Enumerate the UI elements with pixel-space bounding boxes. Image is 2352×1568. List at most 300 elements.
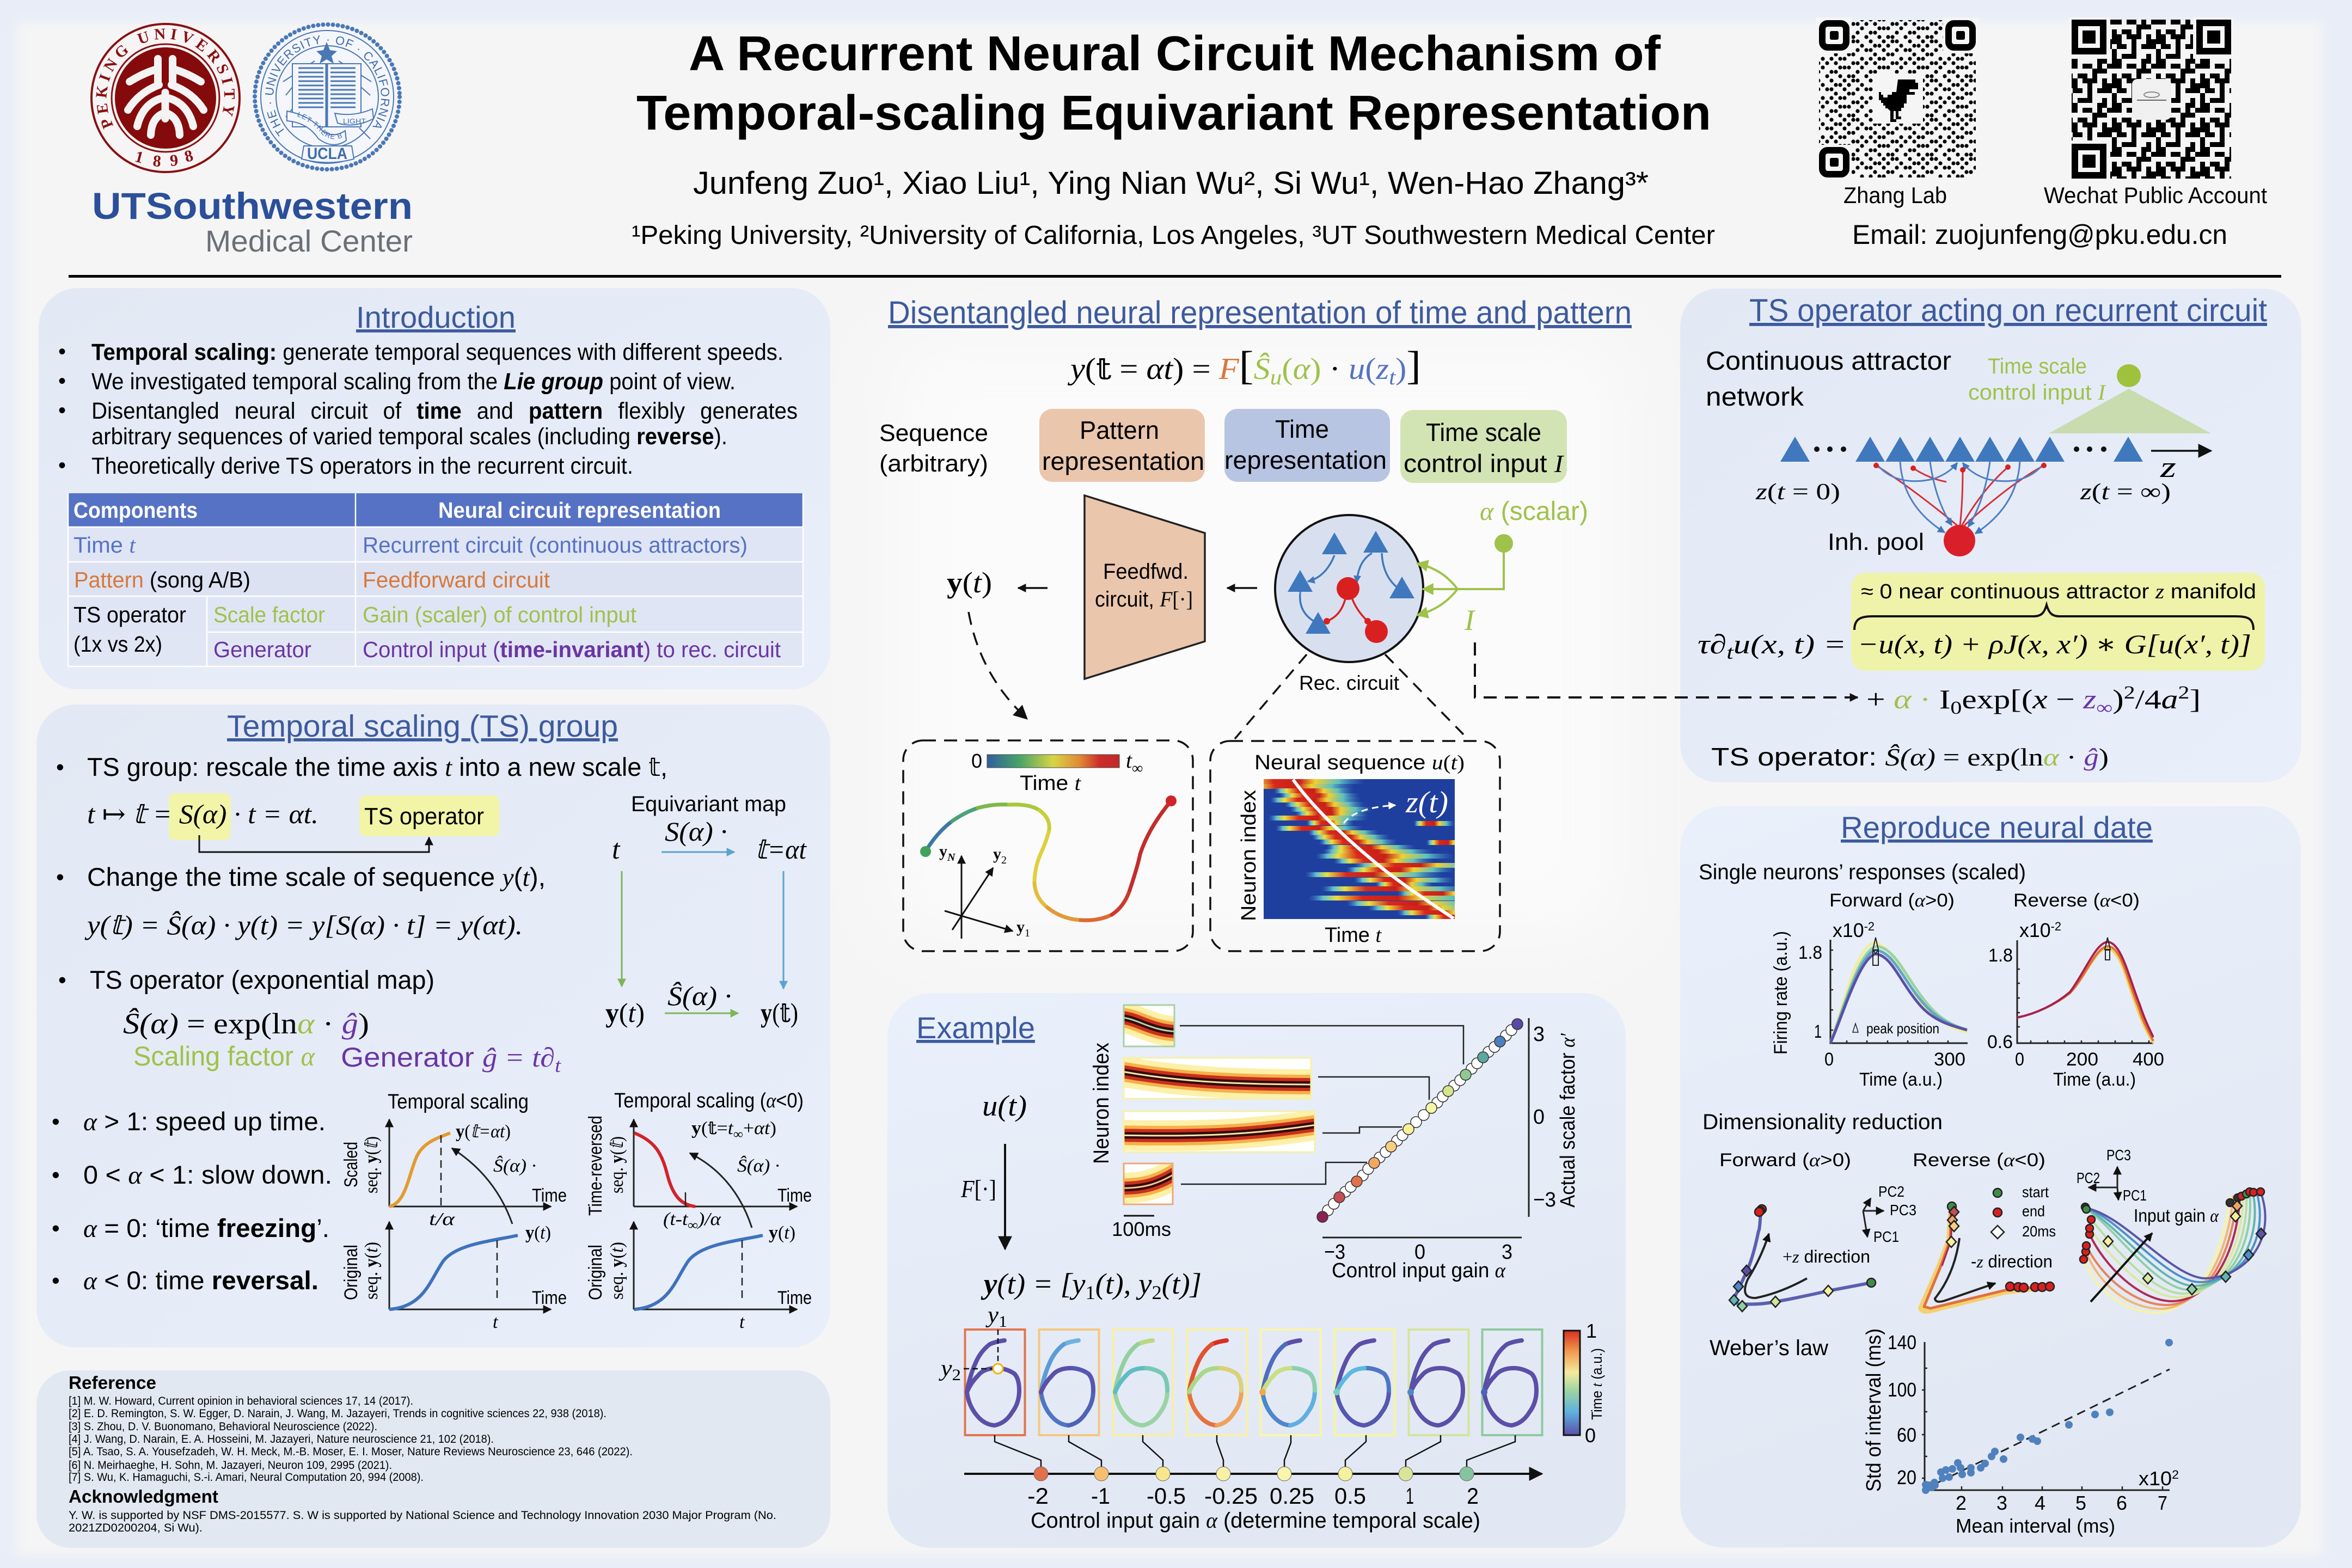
table: components: Control input (time-invariant) to rec. circuit xyxy=(363,637,781,662)
gain axis with connectors: -1 xyxy=(1091,1483,1110,1509)
diagram: equivariant map: Equivariant map xyxy=(631,792,786,816)
chart: temporal scaling reverse: ∞ xyxy=(733,1128,743,1142)
label: generator: Generator ĝ = t∂ xyxy=(341,1042,549,1073)
chart: temporal scaling forward: Temporal scaling xyxy=(388,1091,529,1113)
chart: reverse trajectory xyxy=(1913,1150,2056,1311)
equation: dynamics: + α · I xyxy=(1866,684,1949,714)
colorbar: time: Time t (a.u.) xyxy=(1589,1348,1605,1420)
chart: Weber's law scatter: 2 xyxy=(2172,1468,2179,1481)
recurrent circuit xyxy=(1275,515,1423,662)
heading: Introduction: Introduction xyxy=(356,300,516,334)
F label: F[·] xyxy=(960,1175,996,1203)
chart: input gain trajectories: PC1 xyxy=(2123,1187,2147,1204)
subheading: single neurons: Single neurons’ responses (scaled) xyxy=(1699,860,2026,884)
bullet list: Disentangled neural circuit of time and pattern flexibly generates xyxy=(91,398,798,424)
network diagram: z(t = 0) xyxy=(1755,480,1840,505)
gain axis with connectors: 0.5 xyxy=(1334,1483,1366,1509)
bullet list: arbitrary sequences of varied temporal scales (including reverse). xyxy=(91,424,727,450)
table: components: Time t xyxy=(74,532,137,558)
control input arrows xyxy=(1417,534,1513,615)
diagram: equivariant map: t xyxy=(612,834,621,865)
formula: disentangled: ) xyxy=(1395,352,1406,386)
chart: Weber's law scatter: 5 xyxy=(2075,1492,2086,1514)
gain axis with connectors: -2 xyxy=(1027,1483,1049,1509)
table: components: Gain (scaler) of control input xyxy=(363,602,637,627)
bullets: TS group xyxy=(52,752,667,1295)
chart: temporal scaling reverse: Time xyxy=(777,1288,812,1308)
box: time scale control input xyxy=(1400,410,1567,483)
bullet list: Temporal scaling: generate temporal sequences with different speeds. xyxy=(91,339,783,365)
control input node and projection xyxy=(2049,364,2211,433)
chart: Weber's law scatter: Mean interval (ms) xyxy=(1956,1515,2115,1537)
chart: actual scale factor vs control gain: Control input gain α xyxy=(1332,1259,1506,1282)
chart: temporal scaling forward: Ŝ(α) · xyxy=(493,1155,536,1176)
panel: example xyxy=(887,993,1626,1548)
icon: dinosaur xyxy=(1879,79,1918,122)
chart: temporal scaling forward: Time xyxy=(532,1288,567,1308)
equation: dynamics: t xyxy=(1726,641,1734,663)
bullet list: Theoretically derive TS operators in the recurrent circuit. xyxy=(91,453,633,479)
y1 y2 labels xyxy=(939,1303,1007,1384)
chart: temporal scaling forward: seq. y(t) xyxy=(362,1242,382,1300)
heading: Temporal scaling (TS) group: Temporal scaling (TS) group xyxy=(227,709,618,744)
affiliations: ¹Peking University, ²University of California, Los Angeles, ³UT Southwestern Medical Center xyxy=(632,221,1715,250)
bullet list: • xyxy=(58,369,66,393)
chart: temporal scaling reverse xyxy=(585,1089,812,1332)
formula: y(t): (t)] xyxy=(1162,1267,1202,1300)
logo: Peking University seal: 8 xyxy=(152,152,162,170)
chart: Weber's law scatter: Std of interval (ms) xyxy=(1863,1328,1885,1492)
feedforward trapezoid xyxy=(1085,495,1205,679)
panel: neural sequence heatmap: z(t) xyxy=(1405,786,1448,819)
panel: neural sequence heatmap xyxy=(1210,741,1500,951)
equation: dynamics: u(x, t) = xyxy=(1734,629,1846,659)
chart: temporal scaling forward: y(t) xyxy=(525,1223,551,1243)
formula: sequence scaling: y(𝕥) = Ŝ(α) · y(t) = y[S(α) · t] = y(αt). xyxy=(84,910,523,940)
equation: dynamics: a xyxy=(2161,684,2178,714)
title: A Recurrent Neural Circuit Mechanism of xyxy=(689,27,1661,81)
chart: Weber's law scatter: x10 xyxy=(2139,1467,2170,1490)
chart: temporal scaling reverse: )/α xyxy=(697,1209,721,1229)
y1 y2 labels: y xyxy=(941,1356,951,1381)
gain axis with connectors: -0.25 xyxy=(1204,1483,1258,1509)
label: sequence: (arbitrary) xyxy=(879,450,988,477)
legend: start end 20ms xyxy=(1991,1189,2004,1239)
chart: forward firing rate: Forward ( α>0) xyxy=(1829,890,1955,911)
heading: Example: Example xyxy=(916,1010,1035,1045)
heading: Acknowledgment: Acknowledgment xyxy=(69,1486,218,1506)
chart: actual scale factor vs control gain: 3 xyxy=(1502,1241,1512,1264)
bullets: alpha regimes: α = 0: ‘time freezing’. xyxy=(83,1214,329,1243)
reference list: [4] J. Wang, D. Narain, E. A. Hosseini, M. Jazayeri, Nature neuroscience 21, 102 (2018). xyxy=(69,1433,494,1445)
chart: temporal scaling reverse: Original xyxy=(585,1245,606,1300)
chart: temporal scaling forward: t xyxy=(493,1312,499,1332)
arrow: F mapping xyxy=(1004,1144,1006,1249)
table: components: Components xyxy=(74,498,198,523)
scale bar: 100ms: 100ms xyxy=(1112,1218,1171,1240)
highlight: recurrent term: ≈ 0 near continuous attractor z manifold xyxy=(1861,580,2256,603)
email: Email: zuojunfeng@pku.edu.cn xyxy=(1852,219,2227,250)
box: time scale control input: Time scale xyxy=(1426,418,1541,446)
box: pattern representation xyxy=(1039,409,1205,482)
chart: temporal scaling reverse: y(𝕥=t xyxy=(691,1118,733,1138)
reference list: [1] M. W. Howard, Current opinion in behavioral sciences 17, 14 (2017). xyxy=(69,1395,413,1407)
table: components: TS operator xyxy=(74,602,186,627)
equation: dynamics: 2 xyxy=(2178,683,2189,703)
table: components: Pattern (song A/B) xyxy=(74,567,250,592)
diagram: equivariant map: y(t) xyxy=(605,997,645,1028)
chart: Weber's law scatter: 6 xyxy=(2116,1492,2127,1514)
label: scaling factor: Scaling factor α xyxy=(133,1041,316,1071)
label: time scale control input: control input I xyxy=(1968,380,2106,405)
chart: reverse firing rate: Time (a.u.) xyxy=(2053,1069,2136,1090)
chart: Weber's law scatter: 60 xyxy=(1897,1424,1916,1446)
digit six panels xyxy=(964,1330,1542,1435)
gain axis with connectors: -0.5 xyxy=(1147,1483,1186,1509)
gain axis with connectors: Control input gain α (determine temporal scale) xyxy=(1031,1508,1480,1533)
formula: y(t): y(t) = [y xyxy=(984,1267,1084,1300)
label: time scale control input xyxy=(1968,354,2106,405)
bullets: alpha regimes: 0 < α < 1: slow down. xyxy=(83,1160,332,1190)
equation: dynamics: τ∂ xyxy=(1698,629,1721,659)
chart: reverse firing rate: x10 xyxy=(2019,919,2051,941)
panel: trajectory: ∞ xyxy=(1132,760,1143,777)
formula: disentangled: u xyxy=(1270,365,1282,389)
bullets: alpha regimes xyxy=(52,1107,332,1295)
chart: temporal scaling reverse: (t-t xyxy=(663,1209,686,1229)
table: components: Neural circuit representation xyxy=(438,498,721,523)
output y(t): y(t) xyxy=(947,566,992,599)
arrow: circuit to feedforward xyxy=(1227,587,1257,589)
logo: UT Southwestern: UTSouthwestern xyxy=(92,185,413,227)
network diagram: z(t = ∞) xyxy=(2080,480,2171,505)
chart: forward firing rate: 0 xyxy=(1824,1049,1834,1070)
panel: TS operator on recurrent circuit xyxy=(1680,289,2301,782)
logo: UCLA seal: UCLA xyxy=(307,145,347,163)
authors: Junfeng Zuo¹, Xiao Liu¹, Ying Nian Wu², Si Wu¹, Wen-Hao Zhang³* xyxy=(693,166,1649,201)
panel: introduction xyxy=(39,288,830,689)
chart: reverse trajectory: Reverse ( α<0) xyxy=(1913,1150,2045,1171)
label: continuous attractor network: network xyxy=(1706,383,1804,412)
bullets: alpha regimes: α > 1: speed up time. xyxy=(83,1107,326,1136)
chart: temporal scaling reverse: seq. y(t) xyxy=(607,1242,627,1300)
formula: y(t): 1 xyxy=(1085,1282,1095,1303)
chart: input gain trajectories xyxy=(2077,1147,2266,1313)
box: time representation xyxy=(1224,409,1390,482)
chart: temporal scaling forward: Scaled xyxy=(341,1142,362,1187)
chart: reverse firing rate: 0 xyxy=(2015,1049,2024,1070)
equation: dynamics: ) xyxy=(2112,684,2124,714)
chart: Weber's law scatter: 3 xyxy=(1996,1492,2007,1514)
reference list: [7] S. Wu, K. Hamaguchi, S.-i. Amari, Neural Computation 20, 994 (2008). xyxy=(69,1471,424,1484)
heading: reproduce neural date: Reproduce neural date xyxy=(1841,810,2153,844)
bullets: alpha regimes: • xyxy=(52,1267,60,1293)
panel: trajectory: y xyxy=(993,845,1001,863)
panel: trajectory: t xyxy=(1126,748,1132,773)
chart: forward firing rate: Time (a.u.) xyxy=(1859,1069,1943,1090)
panel: trajectory: 1 xyxy=(1025,927,1030,939)
y1 y2 labels: y xyxy=(988,1303,998,1328)
logo: UCLA seal: LIGHT xyxy=(343,117,366,125)
title: Temporal-scaling Equivariant Representation xyxy=(636,86,1711,140)
heatmap thumbnails xyxy=(1116,1005,1323,1204)
label: Weber's law: Weber’s law xyxy=(1710,1336,1828,1360)
bullets: TS group: TS group: rescale the time axis t into a new scale 𝕥, xyxy=(87,752,667,782)
label: Zhang Lab: Zhang Lab xyxy=(1843,182,1947,208)
u(t) label: u(t) xyxy=(982,1089,1027,1122)
chart: reverse firing rate: 0.6 xyxy=(1987,1032,2013,1052)
chart: temporal scaling forward: y(𝕥=αt) xyxy=(456,1122,511,1142)
feedforward trapezoid: circuit, F[·] xyxy=(1095,587,1193,611)
box: pattern representation: Pattern xyxy=(1080,416,1159,444)
colorbar: time: 1 xyxy=(1586,1320,1597,1342)
table: components: Feedforward circuit xyxy=(363,567,550,592)
chart: reverse firing rate: 1.8 xyxy=(1988,945,2013,966)
chart: forward firing rate: 1 xyxy=(1814,1021,1822,1042)
chart: actual scale factor vs control gain: Actual scale factor α′ xyxy=(1557,1033,1579,1208)
chart: reverse firing rate: -2 xyxy=(2051,920,2061,933)
chart: actual scale factor vs control gain: −3 xyxy=(1324,1241,1345,1264)
chart: forward trajectory: +z direction xyxy=(1783,1247,1870,1266)
chart: temporal scaling forward xyxy=(341,1091,567,1332)
formula: TS operator: TS operator: Ŝ(α) = exp(ln α · ĝ) xyxy=(1711,743,2109,771)
chart: Weber's law scatter: 100 xyxy=(1888,1379,1916,1401)
chart: forward trajectory: PC1 xyxy=(1873,1228,1899,1245)
bullets: TS group: • xyxy=(56,864,64,890)
subheading: dimensionality reduction: Dimensionality reduction xyxy=(1702,1110,1943,1134)
chart: temporal scaling forward: Time xyxy=(532,1185,567,1206)
bullets: TS group: • xyxy=(56,754,64,780)
table: components: Generator xyxy=(213,637,311,662)
label: rec circuit: Rec. circuit xyxy=(1299,672,1400,694)
chart: temporal scaling reverse: seq. y(𝕥) xyxy=(607,1136,627,1193)
acknowledgment text: 2021ZD0200204, Si Wu). xyxy=(69,1522,203,1534)
highlight: recurrent term xyxy=(1851,573,2265,671)
reference list: [3] S. Zhou, D. V. Buonomano, Behavioral Neuroscience (2022). xyxy=(69,1420,377,1433)
colorbar: time xyxy=(1564,1320,1605,1447)
chart: reverse firing rate: Reverse ( α<0) xyxy=(2013,890,2140,911)
bullets: alpha regimes: • xyxy=(52,1215,60,1241)
chart: forward firing rate: x10 xyxy=(1833,919,1864,941)
chart: forward trajectory: PC3 xyxy=(1890,1202,1916,1218)
heading: Disentangled neural representation: Disentangled neural representation of time and pattern xyxy=(888,295,1632,330)
chart: forward firing rate: peak position xyxy=(1866,1020,1939,1037)
label: sequence: Sequence xyxy=(879,420,988,446)
bullet list: • xyxy=(58,340,66,364)
panel: temporal scaling group xyxy=(36,705,830,1347)
chart: temporal scaling forward: seq. y(𝕥) xyxy=(362,1136,382,1193)
bullets: TS group: TS operator (exponential map) xyxy=(90,965,434,994)
bullets: alpha regimes: • xyxy=(52,1108,60,1134)
chart: Weber's law scatter: 7 xyxy=(2158,1492,2167,1514)
formula: exponential map: Ŝ(α) = exp(ln α · ĝ) xyxy=(123,1007,369,1040)
chart: actual scale factor vs control gain xyxy=(1180,1018,1579,1282)
table: components: (1x vs 2x) xyxy=(74,632,162,657)
chart: Weber's law scatter: 20 xyxy=(1897,1466,1916,1489)
chart: forward trajectory: PC2 xyxy=(1878,1183,1904,1200)
logo: UT Southwestern: Medical Center xyxy=(205,224,413,258)
network diagram: Inh. pool xyxy=(1828,529,1924,555)
chart: actual scale factor vs control gain: −3 xyxy=(1533,1189,1556,1211)
chart: reverse trajectory: end xyxy=(2022,1203,2045,1220)
formula: disentangled: t xyxy=(1389,365,1396,389)
panel: reference and acknowledgment xyxy=(36,1370,830,1548)
diagram: equivariant map xyxy=(605,792,807,1028)
logo: UCLA seal: THE · UNIVERSITY · OF · CALIFORNIA xyxy=(265,35,390,137)
chart: input gain trajectories: Input gain α xyxy=(2134,1205,2219,1226)
table: components: Recurrent circuit (continuous attractors) xyxy=(363,532,748,558)
chart: actual scale factor vs control gain: 0 xyxy=(1533,1106,1545,1129)
diagram: equivariant map: S(α) · xyxy=(665,816,727,847)
highlight: S(alpha) xyxy=(169,793,231,840)
reference list xyxy=(69,1395,633,1484)
heading: Reference: Reference xyxy=(69,1373,156,1393)
QR code: Zhang Lab xyxy=(1816,17,1979,181)
box: time representation: representation xyxy=(1224,446,1387,474)
chart: Weber's law scatter: 2 xyxy=(1956,1492,1967,1514)
box: time representation: Time xyxy=(1275,415,1329,443)
chart: reverse trajectory: start xyxy=(2022,1184,2049,1200)
chart: temporal scaling reverse: Time-reversed xyxy=(585,1116,606,1216)
chart: forward firing rate: Firing rate (a.u.) xyxy=(1771,931,1791,1055)
formula: time mapping: t ↦ 𝕥 = S(α) · t = αt. xyxy=(87,799,318,829)
title xyxy=(636,27,1711,140)
y1 y2 labels: 1 xyxy=(999,1313,1007,1331)
panel: trajectory xyxy=(903,740,1193,951)
chart: Weber's law scatter: 4 xyxy=(2035,1492,2045,1514)
bullet list: • xyxy=(58,454,66,477)
equation: dynamics: ∞ xyxy=(2096,698,2112,718)
chart: temporal scaling reverse: + xyxy=(743,1118,754,1138)
panel: neural sequence heatmap: Neural sequence u(t) xyxy=(1254,751,1465,774)
arrow: feedforward to output xyxy=(1018,587,1048,589)
header xyxy=(69,17,2281,278)
label: alpha scalar: α (scalar) xyxy=(1480,497,1588,526)
label: I: I xyxy=(1464,604,1476,636)
chart: actual scale factor vs control gain: 0 xyxy=(1414,1241,1425,1264)
chart: forward firing rate xyxy=(1771,890,1968,1090)
acknowledgment text: Y. W. is supported by NSF DMS-2015577. S. W is supported by National Science and Technology Innovation 2030 Major Program (No. xyxy=(69,1509,776,1522)
label: generator: t xyxy=(555,1055,561,1076)
logo: Peking University seal: 1 xyxy=(133,148,145,167)
callout: TS operator xyxy=(199,795,499,852)
equation: dynamics: /4 xyxy=(2135,684,2161,714)
bullet list: • xyxy=(58,399,66,422)
gain axis with connectors xyxy=(964,1435,1542,1533)
diagram: equivariant map: y(𝕥) xyxy=(761,997,798,1028)
reference list: [5] A. Tsao, S. A. Yousefzadeh, W. H. Meck, M.-B. Moser, E. I. Moser, Nature Reviews Neuroscience 23, 646 (2022). xyxy=(69,1445,633,1458)
chart: temporal scaling reverse: Time xyxy=(777,1185,812,1206)
reference list: [2] E. D. Remington, S. W. Egger, D. Narain, J. Wang, M. Jazayeri, Trends in cognitive sciences 22, 938 (2018). xyxy=(69,1407,607,1420)
formula: disentangled: y(𝕥 = αt) = F[Ŝ xyxy=(1070,344,1269,388)
label: continuous attractor network: Continuous attractor xyxy=(1706,347,1951,376)
bullets: TS group: • xyxy=(58,967,66,993)
chart: forward firing rate: 300 xyxy=(1934,1049,1965,1070)
formula: disentangled: α) · u(z xyxy=(1293,352,1388,386)
chart: forward trajectory xyxy=(1719,1150,1916,1312)
table: components xyxy=(68,493,803,666)
chart: actual scale factor vs control gain: 3 xyxy=(1533,1023,1545,1046)
chart: reverse firing rate: 200 xyxy=(2066,1049,2098,1070)
logo: UT Southwestern xyxy=(92,185,413,258)
panel: neural sequence heatmap: Time t xyxy=(1325,924,1382,947)
chart: input gain trajectories: PC2 xyxy=(2077,1169,2100,1186)
bullets: TS group: Change the time scale of sequence y(t), xyxy=(87,862,546,892)
feedforward trapezoid: Feedfwd. xyxy=(1103,560,1189,584)
chart: temporal scaling forward: t/α xyxy=(429,1209,455,1229)
bullet list xyxy=(58,339,798,479)
chart: Weber's law scatter xyxy=(1863,1328,2179,1537)
logo: Peking University seal: 8 xyxy=(182,146,195,166)
panel: reproduce neural data xyxy=(1680,806,2301,1547)
label: continuous attractor network xyxy=(1706,347,1951,412)
chart: temporal scaling reverse: t xyxy=(739,1312,745,1332)
gain axis with connectors: 2 xyxy=(1467,1483,1479,1509)
bullets: alpha regimes: α < 0: time reversal. xyxy=(83,1266,318,1295)
gain axis with connectors: 1 xyxy=(1406,1483,1414,1509)
y1 y2 labels: 2 xyxy=(952,1366,961,1384)
logo: Peking University seal: 9 xyxy=(169,151,179,170)
chart: input gain trajectories: PC3 xyxy=(2106,1147,2131,1163)
panel: neural sequence heatmap: Neuron index xyxy=(1238,790,1260,921)
equation: dynamics: x − z xyxy=(2032,684,2094,714)
diagram: equivariant map: 𝕥=αt xyxy=(755,834,807,865)
equation: dynamics: exp[( xyxy=(1962,684,2032,714)
callout: TS operator: TS operator xyxy=(364,803,484,830)
chart: temporal scaling reverse: Ŝ(α) · xyxy=(737,1155,780,1176)
equation: dynamics: ] xyxy=(2189,684,2201,714)
panel: trajectory: Time t xyxy=(1020,772,1082,795)
bullet list: We investigated temporal scaling from the Lie group point of view. xyxy=(91,369,736,395)
panel: trajectory: y xyxy=(939,842,947,860)
chart: Weber's law scatter: 140 xyxy=(1888,1331,1916,1353)
chart: temporal scaling reverse: Temporal scaling (α<0) xyxy=(614,1089,804,1112)
formula: y(t): 2 xyxy=(1152,1282,1162,1303)
box: time scale control input: control input I xyxy=(1404,449,1565,477)
heading: TS operator: TS operator acting on recurrent circuit xyxy=(1749,293,2267,328)
panel: trajectory: N xyxy=(947,852,956,863)
equation: dynamics: −u(x, t) + ρJ(x, x′) ∗ G[u(x′, t)] xyxy=(1858,629,2251,659)
formula: disentangled: ( xyxy=(1282,352,1293,386)
table: components: Scale factor xyxy=(213,602,325,627)
dashed arrow: output to trajectory xyxy=(969,612,1027,719)
QR code: Wechat xyxy=(2069,17,2233,181)
gain axis with connectors: 0.25 xyxy=(1270,1483,1314,1509)
chart: temporal scaling reverse: αt) xyxy=(754,1118,776,1138)
label: Wechat Public Account: Wechat Public Account xyxy=(2044,182,2267,208)
formula: disentangled: ] xyxy=(1406,344,1421,388)
chart: reverse trajectory: 20ms xyxy=(2022,1223,2056,1240)
dashed connector: input I to equation xyxy=(1475,642,1858,697)
equation: dynamics xyxy=(1698,629,2251,718)
neuron index label: Neuron index xyxy=(1089,1043,1113,1164)
logo: Peking University seal: PEKING UNIVERSITY xyxy=(96,28,235,130)
network diagram xyxy=(1755,437,2211,556)
bullets: alpha regimes: • xyxy=(52,1162,60,1187)
chart: temporal scaling reverse: ∞ xyxy=(688,1218,698,1233)
reference list: [6] N. Meirhaeghe, H. Sohn, M. Jazayeri, Neuron 109, 2995 (2021). xyxy=(69,1459,392,1472)
acknowledgment text xyxy=(69,1509,776,1534)
chart: forward firing rate: 1.8 xyxy=(1798,942,1822,963)
label: sequence xyxy=(879,420,988,477)
box: pattern representation: representation xyxy=(1042,447,1204,475)
formula: y(t): (t), y xyxy=(1095,1267,1152,1300)
network diagram: z xyxy=(2160,451,2176,483)
panel: trajectory: 2 xyxy=(1001,854,1007,866)
panel: trajectory: 0 xyxy=(971,750,982,772)
chart: reverse firing rate: 400 xyxy=(2133,1049,2164,1070)
diagram: equivariant map: Ŝ(α) · xyxy=(667,981,732,1011)
